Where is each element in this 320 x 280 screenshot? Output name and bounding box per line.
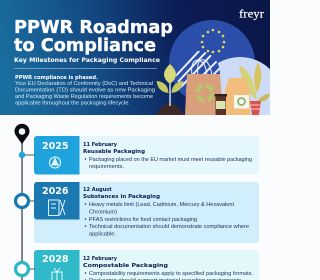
intro text: and Packaging Waste Regulation requirements become: [15, 94, 153, 100]
intro text: PPWR compliance is phased.: [15, 75, 98, 81]
card text: [83, 142, 252, 170]
logo: freyr: freyr: [239, 6, 264, 20]
card text: Technical documentation should demonstrate compliance where: [89, 224, 249, 230]
subtitle: Key Milestones for Packaging Compliance: [14, 56, 161, 64]
card text: Chromium): [89, 210, 117, 216]
card text: Packaging placed on the EU market must meet reusable packaging: [89, 157, 252, 163]
card text: Compostable Packaging: [83, 263, 169, 269]
card text: applicable.: [89, 232, 116, 238]
node: [16, 262, 35, 276]
intro text: applicable throughout the packaging lifecycle.: [15, 100, 130, 106]
year: 2025: [42, 141, 69, 152]
card text: Compostability requirements apply to specified packaging formats.: [89, 271, 253, 277]
illustration: EU stars and packaging: [156, 20, 270, 115]
potted plant: [239, 62, 270, 115]
card text: requirements.: [89, 164, 124, 170]
year: 2026: [42, 186, 69, 197]
card text: Substances in Packaging: [83, 194, 160, 200]
node: [16, 194, 35, 208]
intro text: [15, 75, 155, 106]
striped circle: [176, 51, 220, 92]
header panel: [0, 0, 270, 115]
map pin: [14, 124, 30, 144]
header title: to Compliance: [14, 35, 156, 56]
year: 2028: [42, 254, 69, 265]
card text: 12 August: [83, 187, 112, 193]
intro text: Documentation (TD) should evolve as new Packaging: [15, 88, 155, 94]
icon: substances: [48, 200, 65, 216]
header title: [14, 17, 173, 56]
card: 2026: [16, 182, 259, 243]
intro text: Your EU Declaration of Conformity (DoC) and Technical: [15, 81, 153, 87]
icon: gift box: [52, 268, 62, 280]
header title: PPWR Roadmap: [14, 17, 173, 38]
paper bag: [185, 60, 223, 115]
card text: PFAS restrictions for food contact packaging: [89, 217, 197, 223]
node: [19, 152, 35, 158]
timeline: [14, 124, 30, 280]
card text: Heavy metals limit (Lead, Cadmium, Mercury & Hexavalent: [89, 202, 235, 208]
EU stars: [201, 29, 225, 53]
card: 2028: [16, 250, 259, 280]
icon: reuse: [50, 157, 60, 168]
card text: 12 February: [83, 256, 118, 262]
sprout: [156, 64, 184, 115]
card: 2025: [19, 136, 259, 174]
card text: 11 February: [83, 142, 118, 148]
coffee cup: [214, 94, 227, 115]
pouch: [225, 78, 250, 115]
card text: Reusable Packaging: [83, 149, 145, 155]
card text: [83, 256, 253, 280]
card text: [83, 187, 249, 238]
